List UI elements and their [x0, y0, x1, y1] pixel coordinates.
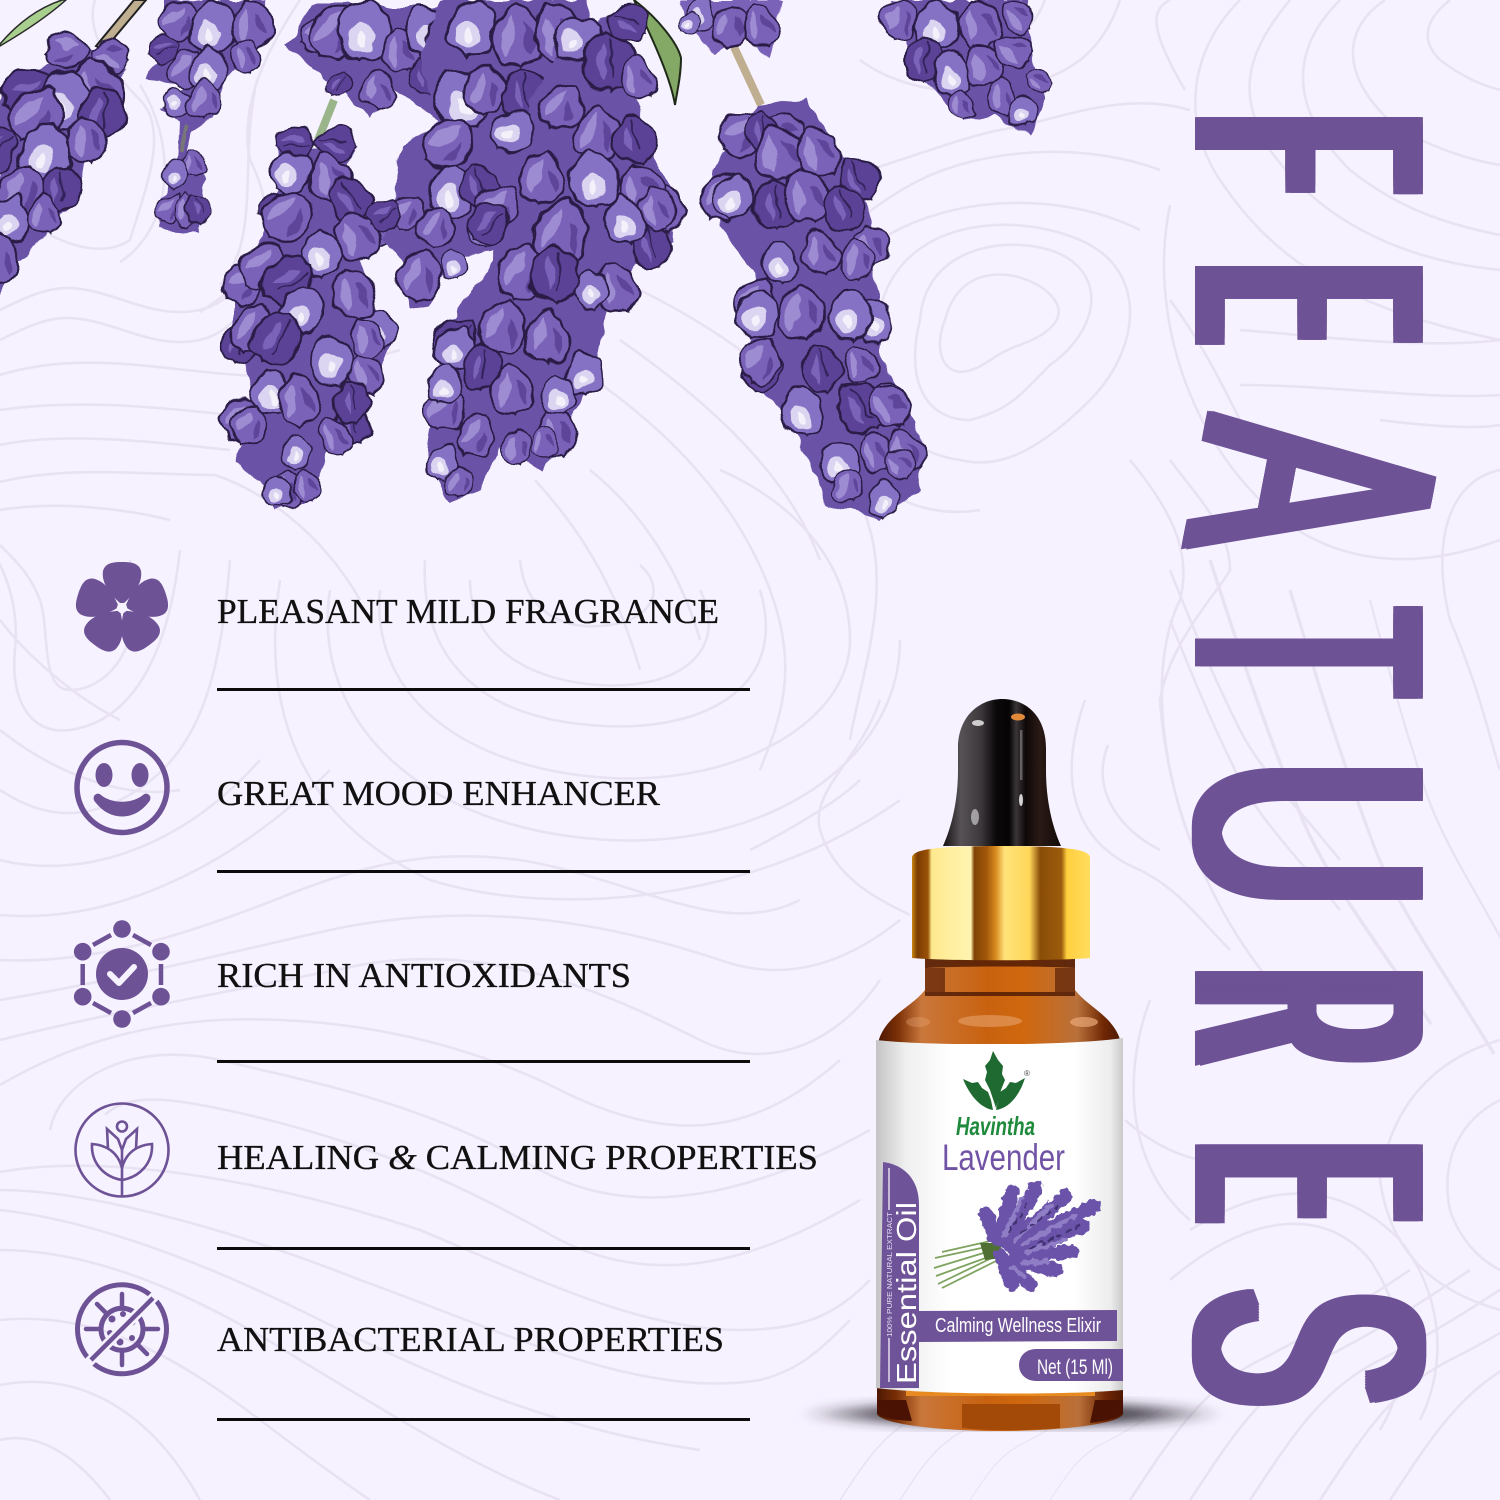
- registered mark: ®: [1024, 1069, 1030, 1078]
- sprig: centre left: [212, 123, 404, 512]
- glass base: [877, 1388, 1123, 1431]
- tagline text: Calming Wellness Elixir: [935, 1315, 1101, 1337]
- product name: Lavender: [942, 1137, 1065, 1178]
- sprig: centre: [363, 0, 591, 308]
- feature 1: pleasant mild fragrance: [72, 562, 719, 657]
- vertical title: FEATURES: F: [1128, 108, 1490, 176]
- vertical title: FEATURES: U: [1128, 752, 1490, 902]
- stem: centre sprig: [318, 100, 334, 140]
- stem: right sprig: [734, 47, 761, 105]
- feature 4: healing and calming properties: [76, 1104, 818, 1196]
- bulb highlights: [971, 714, 1025, 825]
- vertical title: FEATURES: E: [1128, 1136, 1490, 1204]
- purple side tab: [880, 1162, 919, 1388]
- pure extract text: 100% PURE NATURAL EXTRACT: [885, 1212, 894, 1337]
- lavender bouquet: [934, 1188, 1094, 1288]
- sprig: large centre: [421, 0, 688, 504]
- net volume pill: [1019, 1349, 1123, 1381]
- stem: left sprig: [96, 0, 146, 50]
- icon: lotus in circle: [76, 1104, 168, 1196]
- gold collar: [912, 846, 1090, 960]
- product: lavender oil bottle: [800, 699, 1224, 1431]
- text: ANTIBACTERIAL PROPERTIES: [217, 1320, 724, 1359]
- brand logo leaves: [963, 1051, 1025, 1110]
- label: [876, 1038, 1123, 1394]
- lavender sprigs illustration: [0, 0, 1054, 519]
- icon: crossed-out bacteria: [78, 1285, 166, 1374]
- net volume text: Net (15 Ml): [1037, 1356, 1113, 1379]
- sprig: far left: [0, 30, 132, 295]
- icon: flower: [72, 562, 172, 657]
- text: RICH IN ANTIOXIDANTS: [217, 956, 631, 995]
- feature 2: great mood enhancer: [77, 742, 661, 832]
- flower heads: [0, 0, 1054, 519]
- text: GREAT MOOD ENHANCER: [217, 774, 661, 813]
- dropper bulb: [943, 699, 1061, 846]
- vertical title: FEATURES: E: [1128, 258, 1490, 326]
- essential oil text: Essential Oil: [891, 1202, 922, 1384]
- sprig: small top right: [672, 0, 783, 60]
- sprig: right: [692, 98, 929, 519]
- leaf: top left: [0, 0, 66, 46]
- rules on tab: [888, 1168, 890, 1382]
- tagline band: [919, 1310, 1117, 1342]
- sprig: small upper left: [144, 0, 278, 232]
- vertical title: FEATURES: S: [1128, 1281, 1490, 1398]
- feature 3: rich in antioxidants: [74, 920, 631, 1028]
- icon: molecule with check: [74, 920, 170, 1028]
- brand name: Havintha: [956, 1111, 1035, 1141]
- text: PLEASANT MILD FRAGRANCE: [217, 592, 719, 631]
- sprig: top centre: [285, 0, 482, 120]
- sprig: top right: [878, 0, 1054, 135]
- text: HEALING & CALMING PROPERTIES: [217, 1138, 818, 1177]
- feature 5: antibacterial properties: [78, 1285, 724, 1374]
- vertical title: FEATURES: R: [1128, 961, 1490, 1050]
- glass neck and shoulders: [878, 958, 1121, 1044]
- bottle shadow: [800, 1399, 1224, 1429]
- icon: smiley: [77, 742, 167, 832]
- vertical title: FEATURES: T: [1128, 603, 1490, 687]
- feature list: [72, 562, 818, 1421]
- leaf: top centre: [634, 0, 681, 105]
